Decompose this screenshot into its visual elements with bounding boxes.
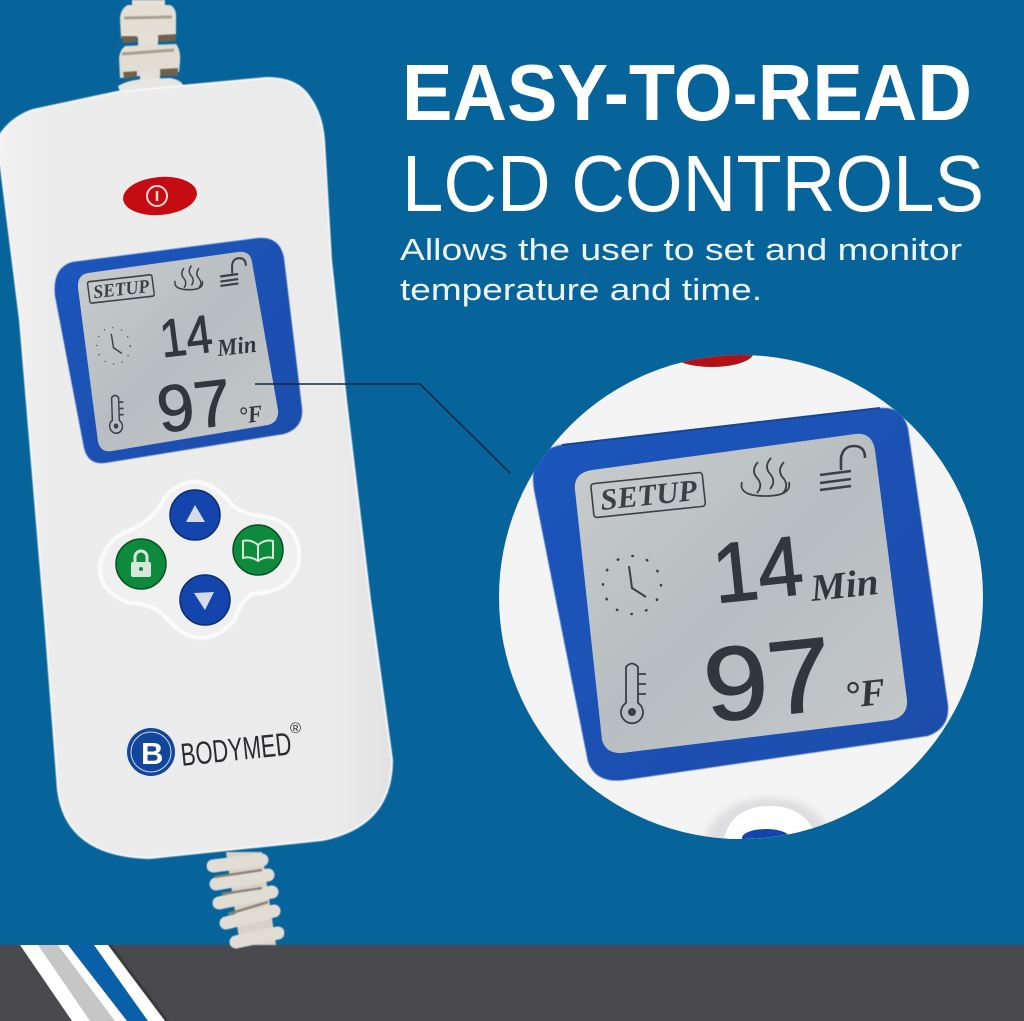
small LCD contents: Min: [214, 330, 258, 361]
description text: Allows the user to set and monitor: [400, 232, 962, 267]
large LCD: thermometer icon: [621, 664, 646, 723]
button: book: [233, 525, 283, 575]
zoom circle: [499, 337, 983, 850]
large LCD: temperature: °F: [843, 671, 887, 717]
large LCD: minutes: [708, 518, 881, 621]
small LCD contents: [87, 258, 265, 447]
leader line: [255, 384, 510, 473]
large LCD: lock icon: [820, 446, 865, 490]
cord: top: [118, 0, 184, 92]
red button edge: [682, 355, 753, 367]
button: up arrow: [170, 490, 220, 540]
large LCD: SETUP: SETUP: [599, 474, 699, 517]
brand logo: ®: [290, 720, 301, 737]
button: lock: [116, 539, 166, 589]
description text: temperature and time.: [400, 272, 762, 307]
bottom bar with stripes: [0, 945, 1024, 1021]
blue button edge: [742, 829, 788, 839]
large LCD: temperature: [698, 616, 887, 745]
title: EASY-TO-READ: [402, 48, 972, 137]
large LCD: minutes: 14: [708, 518, 807, 621]
small LCD contents: SETUP: [92, 275, 151, 303]
frame top dark edge: [562, 408, 880, 445]
large LCD: temperature: 97: [698, 616, 838, 745]
button: down arrow: [180, 575, 230, 625]
title: [402, 48, 984, 228]
cord: bottom: [213, 852, 278, 945]
remote control: [0, 78, 392, 858]
small LCD screen: [78, 252, 278, 451]
small LCD frame: [55, 238, 302, 463]
button pad: [100, 482, 299, 638]
title: LCD CONTROLS: [402, 139, 984, 228]
small LCD contents: 97: [153, 366, 236, 447]
bottom button pad edge: [702, 797, 828, 839]
remote body: [0, 78, 392, 858]
brand logo: B: [141, 736, 163, 771]
brand logo: BODYMED: [179, 726, 293, 773]
small LCD contents: 14: [156, 304, 216, 369]
small LCD contents: °F: [237, 399, 264, 429]
large LCD: clock icon: [603, 556, 661, 614]
large LCD frame: [533, 408, 948, 781]
brand logo: [127, 720, 301, 776]
power button: [121, 174, 199, 218]
large LCD screen: [575, 434, 907, 753]
description text: [400, 232, 962, 307]
large LCD: minutes: Min: [808, 561, 881, 610]
large LCD: heat icon: [741, 458, 789, 496]
